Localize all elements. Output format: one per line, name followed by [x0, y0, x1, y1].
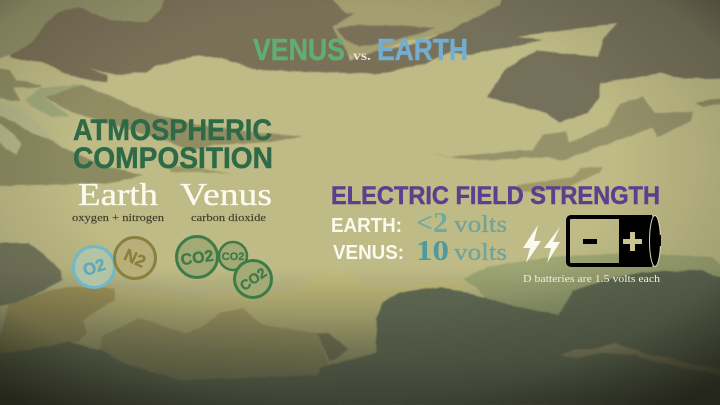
left pale strips	[0, 100, 62, 145]
lower heading tail	[170, 165, 232, 174]
minus sign	[583, 239, 597, 244]
top left olive area	[0, 0, 170, 60]
upper strip near heading	[517, 167, 603, 192]
right strip	[432, 97, 693, 160]
text: carbon dioxide: carbon dioxide	[191, 212, 266, 224]
panel: electric field strength	[331, 182, 661, 285]
left dark blob	[0, 243, 62, 307]
left wedge	[0, 115, 143, 186]
label: Venus: Venus	[180, 176, 272, 212]
heading band	[45, 85, 303, 150]
bottom left dark mound	[0, 342, 340, 405]
plus sign	[623, 232, 642, 251]
icon: CO2 molecule large: CO2	[180, 248, 215, 269]
icon: battery	[568, 215, 661, 267]
icon: O2 molecule: O2	[80, 255, 108, 280]
bottom right tan strip	[560, 343, 720, 376]
title: vs.	[353, 49, 371, 64]
label: Venus voltage	[333, 236, 507, 267]
top tan area	[320, 0, 510, 60]
top right brown and grey area	[437, 0, 720, 122]
icon: CO2 molecule small	[219, 242, 247, 270]
label: Venus voltage: 10	[416, 236, 449, 267]
note: D batteries: D batteries are 1.5 volts each	[523, 273, 661, 285]
icon: CO2 molecule small: CO2	[222, 251, 244, 263]
text: oxygen + nitrogen: oxygen + nitrogen	[72, 212, 165, 224]
title	[253, 32, 468, 67]
heading: electric field strength: ELECTRIC FIELD STRENGTH	[331, 182, 660, 210]
label: Earth: Earth	[78, 176, 158, 212]
label: Earth voltage: <2	[416, 208, 448, 239]
panel: atmospheric composition	[72, 114, 273, 298]
right edge flecks	[695, 97, 720, 107]
label: Venus voltage: VENUS:	[333, 242, 404, 264]
icon: CO2 molecule large	[176, 236, 218, 278]
icon: N2 molecule	[114, 238, 156, 278]
left green patch	[25, 84, 84, 117]
heading: atmospheric composition: COMPOSITION	[73, 142, 273, 175]
big dark green area	[300, 270, 720, 405]
label: Earth voltage	[331, 208, 507, 239]
icon: CO2 molecule medium: CO2	[237, 264, 270, 294]
left grey tan shape	[0, 68, 42, 102]
title: EARTH	[377, 32, 468, 67]
label: Venus voltage: volts	[454, 240, 507, 266]
left brown patch	[0, 287, 115, 355]
icon: lightning bolts	[523, 225, 560, 263]
small dark brown mound	[317, 333, 349, 362]
heading: atmospheric composition	[73, 114, 273, 175]
label: Earth voltage: volts	[454, 212, 507, 238]
heading: atmospheric composition: ATMOSPHERIC	[73, 114, 272, 147]
brown mounds	[100, 308, 340, 405]
top brown band	[10, 0, 470, 82]
title: VENUS	[253, 32, 345, 67]
icon: N2 molecule: N2	[121, 245, 149, 272]
label: Earth voltage: EARTH:	[331, 215, 402, 237]
brown strip by title	[337, 25, 435, 47]
lower pale yellow mounds	[60, 270, 470, 405]
icon: O2 molecule	[74, 246, 114, 288]
lower pale green mound	[464, 253, 720, 320]
